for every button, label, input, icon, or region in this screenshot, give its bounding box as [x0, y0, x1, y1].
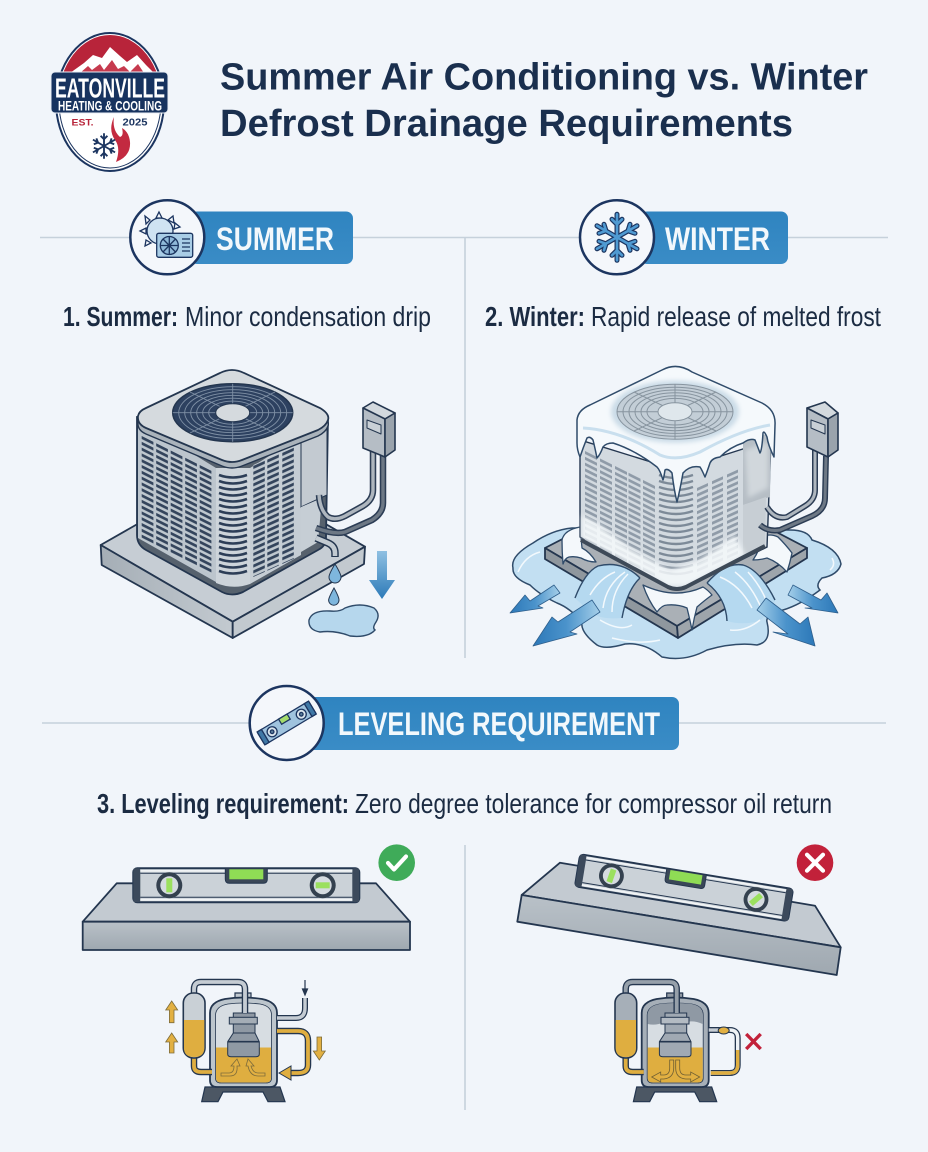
logo: Eatonville Heating & Cooling badge: [50, 30, 170, 171]
dry upper dome: [648, 1003, 703, 1025]
frosted fan: [611, 381, 739, 443]
title: Defrost Drainage Requirements: [220, 103, 793, 145]
arrow: drip down: [369, 551, 395, 599]
caption: winter: 2. Winter:: [485, 301, 585, 332]
electrical box: [807, 402, 838, 457]
icon: spirit level: [257, 701, 316, 745]
icon: sun and outdoor unit: [140, 212, 193, 257]
arrow: small intake: [302, 980, 308, 995]
motor: [659, 1013, 691, 1057]
dark base band: [581, 540, 765, 589]
title: [220, 56, 868, 145]
motor: [228, 1013, 259, 1057]
feet: [202, 1087, 285, 1102]
caption: leveling: Zero degree tolerance for compressor oil return: [355, 788, 832, 819]
section badge: leveling requirement: [250, 686, 679, 760]
louvers left face: [142, 435, 211, 575]
oil return pipe: [626, 1058, 644, 1072]
caption: leveling: 3. Leveling requirement:: [97, 788, 349, 819]
illustration: compressor with oil return (correct): [166, 980, 325, 1102]
section badge: summer: [130, 200, 353, 274]
slab: [517, 863, 841, 975]
caption: summer: Minor condensation drip: [185, 301, 431, 332]
frost at base: [582, 442, 768, 586]
logo tagline: HEATING & COOLING: [58, 98, 162, 114]
spirit level tilted: [575, 854, 793, 921]
title: Summer Air Conditioning vs. Winter: [220, 56, 868, 98]
shell: [667, 993, 683, 998]
badge label: WINTER: [665, 221, 770, 257]
divider lines: [40, 238, 888, 1110]
arrows: water spreading outward: [510, 585, 838, 646]
louvers corner: [219, 475, 247, 574]
water drops: [329, 564, 341, 605]
illustration: winter frosted unit with rapid meltwater: [510, 366, 841, 658]
illustration: summer AC unit with minor drip: [101, 370, 395, 638]
cascading water: [575, 564, 775, 623]
meltwater pool: [513, 528, 841, 658]
logo year: 2025: [122, 118, 148, 128]
conduits: [316, 448, 383, 533]
icon: red cross: [797, 844, 833, 881]
icon: snowflake: [597, 214, 637, 260]
arrows: oil pooling: [652, 1060, 700, 1082]
suction pipe: [626, 982, 677, 1013]
logo established: EST.: [72, 118, 94, 128]
icon: green check: [378, 844, 415, 881]
caption: summer: 1. Summer:: [63, 301, 178, 332]
arrows: oil flow: [166, 1001, 325, 1076]
louvers right face: [253, 447, 294, 577]
caption: winter: [485, 301, 881, 332]
illustration: tilted pad (incorrect): [517, 844, 841, 975]
oil sump: [216, 1048, 271, 1082]
spirit level: [133, 868, 359, 902]
snow cap with icicles: [577, 366, 775, 502]
caption: summer: [63, 301, 431, 332]
conduits: [760, 450, 826, 530]
section badge: winter: [580, 200, 788, 274]
puddle: [309, 605, 378, 636]
badge label: LEVELING REQUIREMENT: [338, 706, 660, 742]
fan grille: [173, 384, 293, 442]
logo banner: [51, 72, 168, 113]
pad: [545, 480, 807, 638]
logo snowflake: [93, 133, 115, 159]
electrical box: [363, 402, 395, 457]
logo name: EATONVILLE: [55, 72, 165, 104]
suction pipe: [194, 982, 245, 1013]
concrete pad: [101, 470, 365, 638]
oil return pipe: [194, 1058, 212, 1072]
badge label: SUMMER: [216, 221, 334, 257]
unit base and body: [137, 417, 328, 594]
shell: [235, 993, 251, 998]
blocked return pipe: [709, 1027, 720, 1033]
discharge pipes: [277, 998, 305, 1018]
logo flame: [111, 117, 130, 162]
icon: red x blocked: [746, 1034, 761, 1049]
accumulator: [615, 993, 637, 1058]
slab: [83, 883, 410, 950]
illustration: compressor with blocked oil return (incorrect): [615, 982, 761, 1102]
illustration: level pad (correct): [83, 844, 415, 950]
caption: leveling: [97, 788, 832, 819]
accumulator: [183, 993, 205, 1058]
frosted body: [580, 440, 771, 590]
snow on pad corners: [562, 527, 792, 630]
lid: [138, 376, 328, 468]
oil sump: [648, 1048, 703, 1082]
drain spout: [316, 538, 335, 557]
feet: [633, 1087, 717, 1102]
